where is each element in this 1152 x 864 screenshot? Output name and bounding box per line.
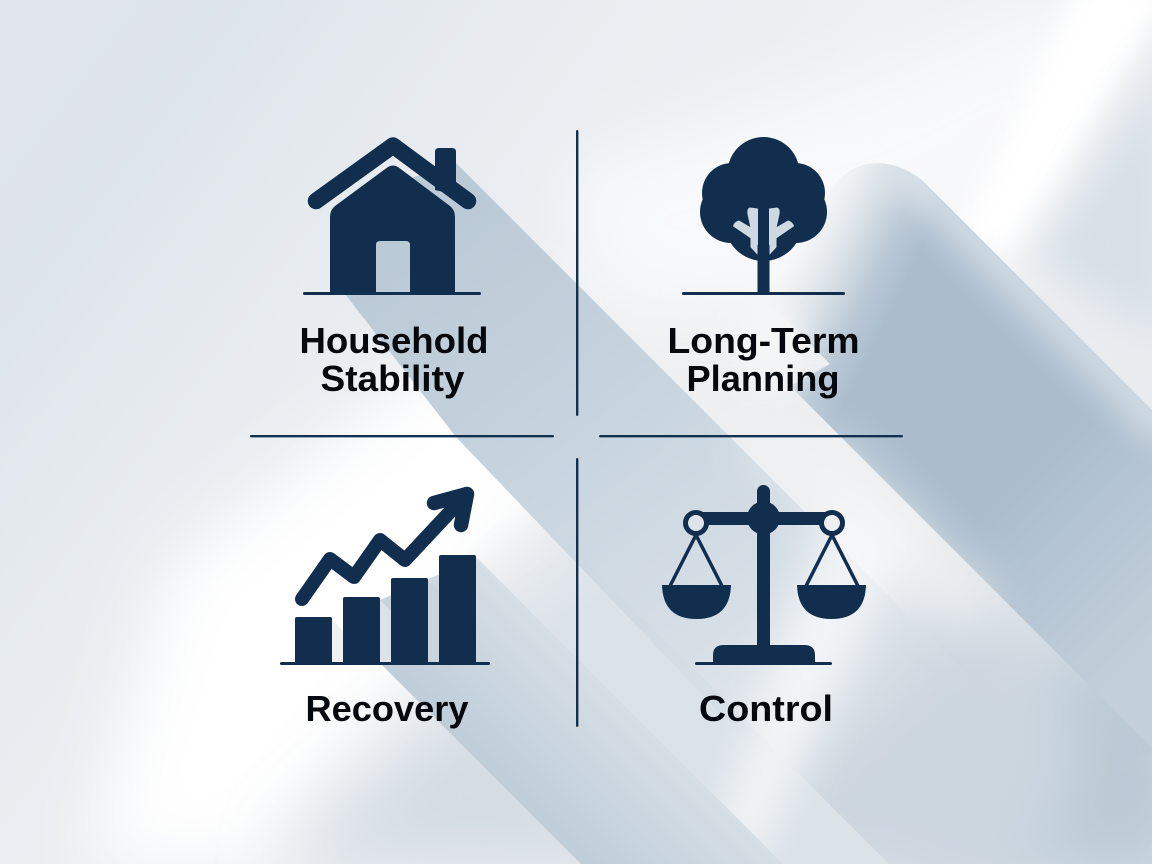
label: Long-Term Planning: Long-Term <box>668 320 860 361</box>
label: Household Stability <box>300 320 488 399</box>
label: Household Stability: Stability <box>320 358 464 399</box>
long shadow: chart <box>332 558 783 864</box>
label: Household Stability: Household <box>300 320 488 361</box>
quadrant dividers <box>250 130 903 727</box>
light glare across lower shadows <box>705 490 905 864</box>
icon: bar chart with arrow <box>280 494 490 665</box>
label: Control: Control <box>699 688 833 729</box>
label: Long-Term Planning: Planning <box>686 358 840 399</box>
panel: recovery <box>280 494 490 729</box>
label: Long-Term Planning <box>668 320 860 399</box>
label: Recovery: Recovery <box>306 688 468 729</box>
long shadow: tree <box>790 163 1152 674</box>
light glare beside long-term label <box>734 301 802 389</box>
icon: balance scales <box>662 485 866 665</box>
panel: control <box>662 485 866 729</box>
panel: household stability <box>300 146 488 399</box>
icon: house <box>303 146 481 295</box>
lighter shadow strip between house and chart shadows <box>415 500 889 864</box>
panel: long-term planning <box>668 137 860 399</box>
long shadow: house <box>345 163 1152 864</box>
brighter gap between house and tree shadow <box>730 437 1000 640</box>
icon: tree <box>682 137 845 295</box>
